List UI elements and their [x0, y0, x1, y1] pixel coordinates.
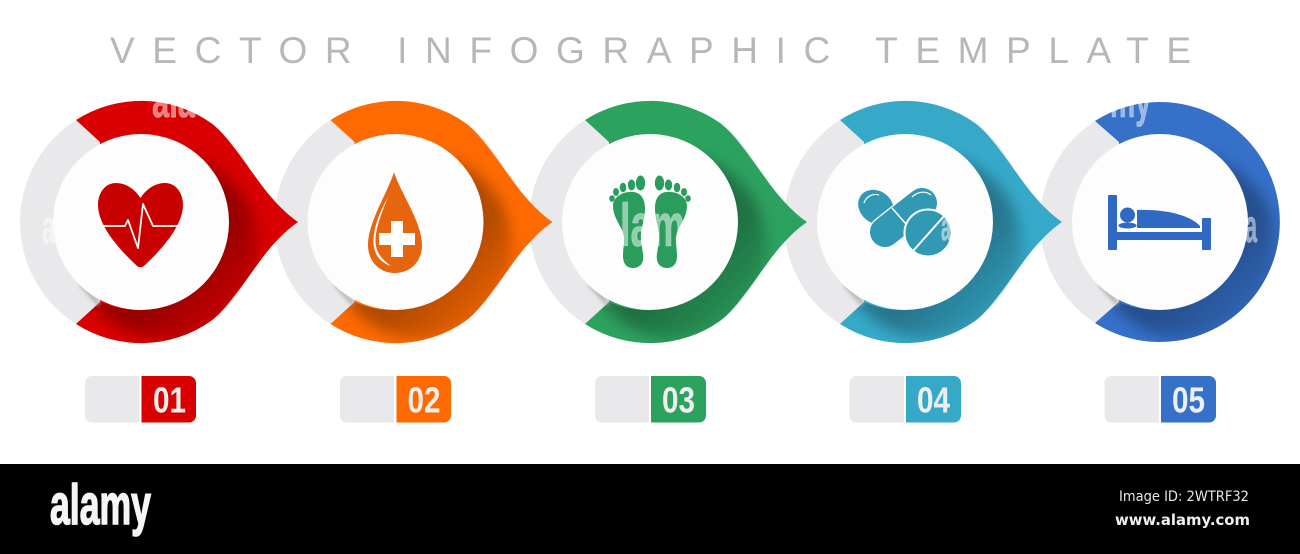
website: www.alamy.com	[1115, 511, 1250, 529]
icon: pills	[851, 183, 952, 256]
watermark overlays: lam	[620, 192, 685, 259]
badge: step 3 green pointer	[562, 101, 807, 343]
watermark overlays: ala	[152, 75, 195, 127]
grey ring backgrounds	[20, 101, 1280, 343]
number tag 01	[85, 376, 196, 422]
badge: step 4 teal pointer	[817, 101, 1062, 343]
number tag 02: 02	[408, 380, 440, 420]
number tag 03	[595, 376, 706, 422]
number tag 04: 04	[917, 380, 950, 420]
number tag 04	[850, 376, 961, 422]
badge: step 1 red pointer	[53, 101, 298, 343]
number tag 01: 01	[153, 380, 186, 420]
title: VECTOR INFOGRAPHIC TEMPLATE	[110, 30, 1191, 71]
number tag 02	[340, 376, 451, 422]
number tag 03: 03	[662, 380, 695, 420]
icon: blood drop with cross	[368, 172, 422, 273]
icon: heart with pulse line	[98, 183, 183, 267]
icon: footprints	[609, 176, 691, 268]
number tag 05	[1104, 376, 1216, 422]
badge: step 2 orange pointer	[308, 101, 552, 343]
alamy logo: alamy	[50, 473, 151, 537]
watermark overlays	[42, 75, 1257, 259]
icon: person in bed	[1108, 195, 1211, 250]
image id: Image ID: 2WTRF32	[1119, 489, 1249, 505]
watermark overlays: a	[941, 207, 951, 249]
text: a	[1245, 200, 1257, 252]
watermark overlays: my	[1110, 75, 1151, 127]
number tag 05: 05	[1172, 380, 1205, 420]
footer bar	[0, 464, 1300, 554]
watermark overlays: a	[42, 201, 55, 253]
badge: step 5 blue ring	[1072, 102, 1280, 342]
